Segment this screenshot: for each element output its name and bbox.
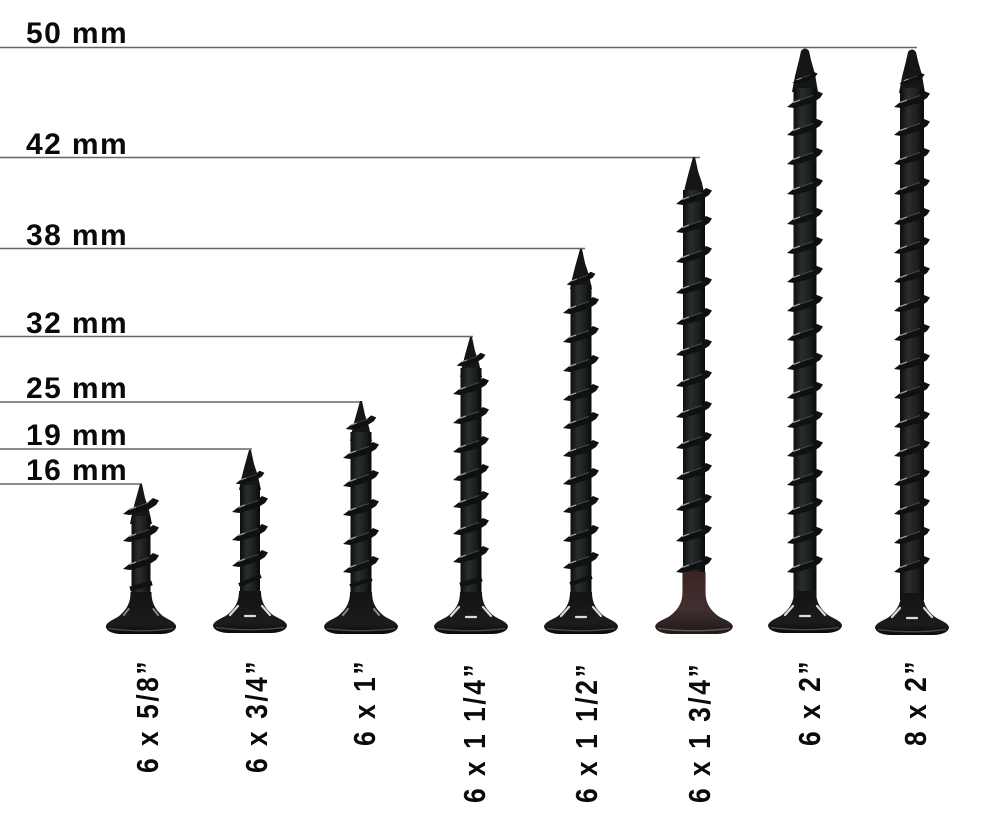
screw: 6 x 2 (768, 48, 842, 633)
leader line: 19 mm (0, 448, 252, 450)
screw: 8 x 2 (875, 50, 949, 635)
leader line: 50 mm (0, 46, 917, 48)
length label: 19 mm: 19 mm (26, 419, 128, 452)
length label: 25 mm: 25 mm (26, 372, 128, 405)
size label: 8 x 2: 8 x 2” (899, 659, 934, 746)
size label: 6 x 2: 6 x 2” (793, 659, 828, 746)
size label: 6 x 1 1/4: 6 x 1 1/4” (458, 662, 493, 803)
size label: 6 x 1: 6 x 1” (348, 659, 383, 746)
leader line: 16 mm (0, 483, 142, 485)
screw: 6 x 1 3/4 (655, 157, 733, 634)
length label: 42 mm: 42 mm (26, 128, 128, 161)
leader line: 25 mm (0, 401, 362, 403)
length label: 50 mm: 50 mm (26, 17, 128, 50)
leader line: 38 mm (0, 248, 585, 250)
length label: 38 mm: 38 mm (26, 219, 128, 252)
length label: 16 mm: 16 mm (26, 454, 128, 487)
screw: 6 x 3/4 (213, 450, 287, 633)
size label: 6 x 1 1/2: 6 x 1 1/2” (570, 662, 605, 803)
size label: 6 x 5/8: 6 x 5/8” (131, 659, 166, 773)
length label: 32 mm: 32 mm (26, 307, 128, 340)
screw: 6 x 1 1/4 (434, 337, 508, 634)
screw: 6 x 1 (324, 401, 398, 634)
screw: 6 x 5/8 (106, 484, 176, 634)
leader line: 32 mm (0, 336, 473, 338)
size label: 6 x 3/4: 6 x 3/4” (240, 659, 275, 773)
leader line: 42 mm (0, 156, 700, 158)
size label: 6 x 1 3/4: 6 x 1 3/4” (683, 662, 718, 803)
screw: 6 x 1 1/2 (544, 249, 618, 634)
